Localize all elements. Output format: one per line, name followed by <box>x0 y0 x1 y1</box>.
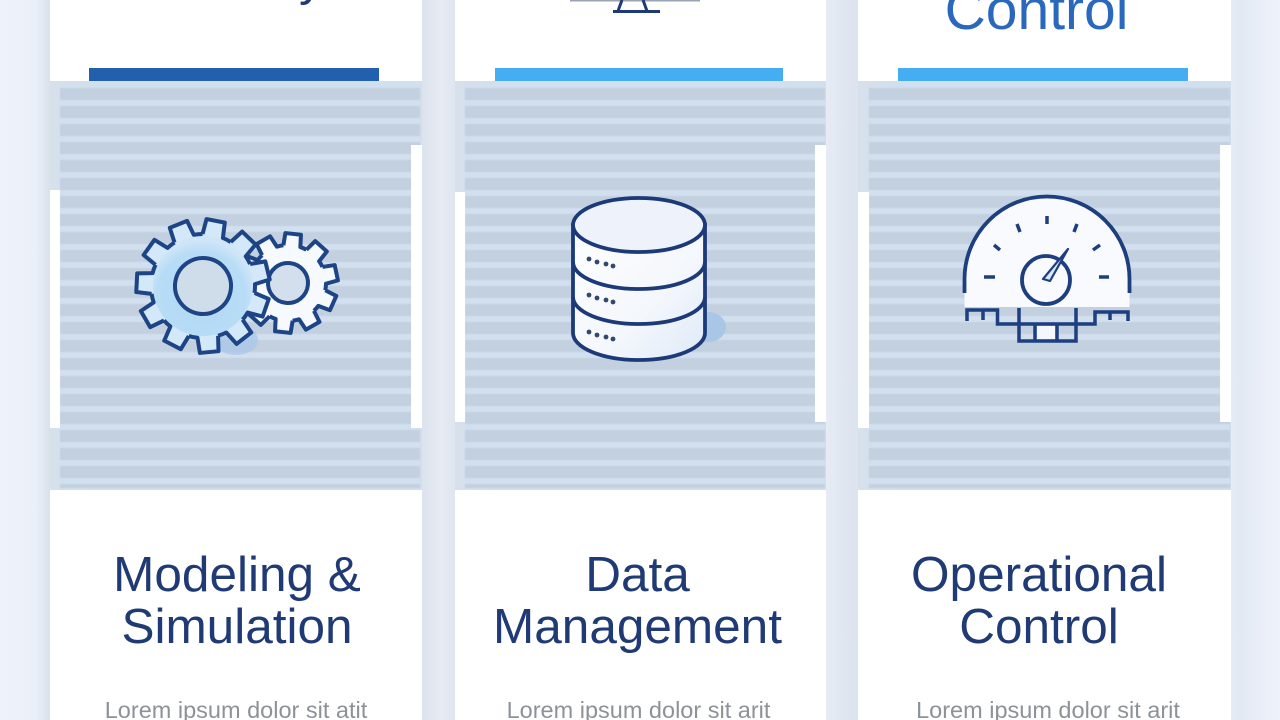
horizontal stripes <box>869 88 1230 488</box>
panel: modeling and simulation <box>50 0 422 720</box>
accent bar <box>89 68 379 81</box>
white edge left <box>455 192 465 422</box>
gauge needle <box>1043 249 1068 281</box>
white edge right <box>815 145 826 422</box>
base window <box>1037 326 1055 339</box>
horizontal stripes <box>465 88 825 488</box>
horizontal stripes <box>60 88 420 488</box>
indicator dots <box>587 257 615 341</box>
icon: gauge <box>962 194 1132 343</box>
panel: operational control <box>858 0 1231 720</box>
heading: Modeling & <box>113 547 361 602</box>
large gear <box>123 208 283 367</box>
accent bar <box>898 68 1188 81</box>
gutter: between panels two and three <box>826 0 858 720</box>
white edge right <box>1220 145 1231 422</box>
gutter: between panels one and two <box>422 0 455 720</box>
white edge left <box>50 190 60 428</box>
gauge ticks <box>984 216 1109 277</box>
striped image area <box>455 81 826 490</box>
gauge arc <box>964 196 1130 293</box>
heading: Control <box>959 599 1119 654</box>
icon: gears <box>134 217 340 355</box>
top disc <box>573 198 705 252</box>
heading: Simulation <box>121 599 353 654</box>
heading: Data <box>585 547 690 602</box>
striped image area <box>50 81 422 490</box>
gauge base <box>967 308 1128 341</box>
monitor icon clipped at top <box>570 0 700 13</box>
white edge right <box>411 145 422 428</box>
disc separators <box>573 262 705 324</box>
heading: Operational <box>911 547 1167 602</box>
gauge hub <box>1022 256 1070 304</box>
heading <box>113 547 361 654</box>
accent bar <box>495 68 783 81</box>
panel: data management <box>455 0 826 720</box>
icon: database <box>571 196 726 362</box>
small gear <box>232 229 344 337</box>
heading <box>911 547 1167 654</box>
heading: Management <box>493 599 782 654</box>
striped image area <box>858 81 1231 490</box>
database shadow <box>690 312 726 342</box>
gear drop shadow <box>214 325 258 355</box>
white edge left <box>858 192 869 428</box>
gauge dial <box>964 196 1130 307</box>
heading <box>493 547 782 654</box>
cylinder body <box>573 225 705 360</box>
